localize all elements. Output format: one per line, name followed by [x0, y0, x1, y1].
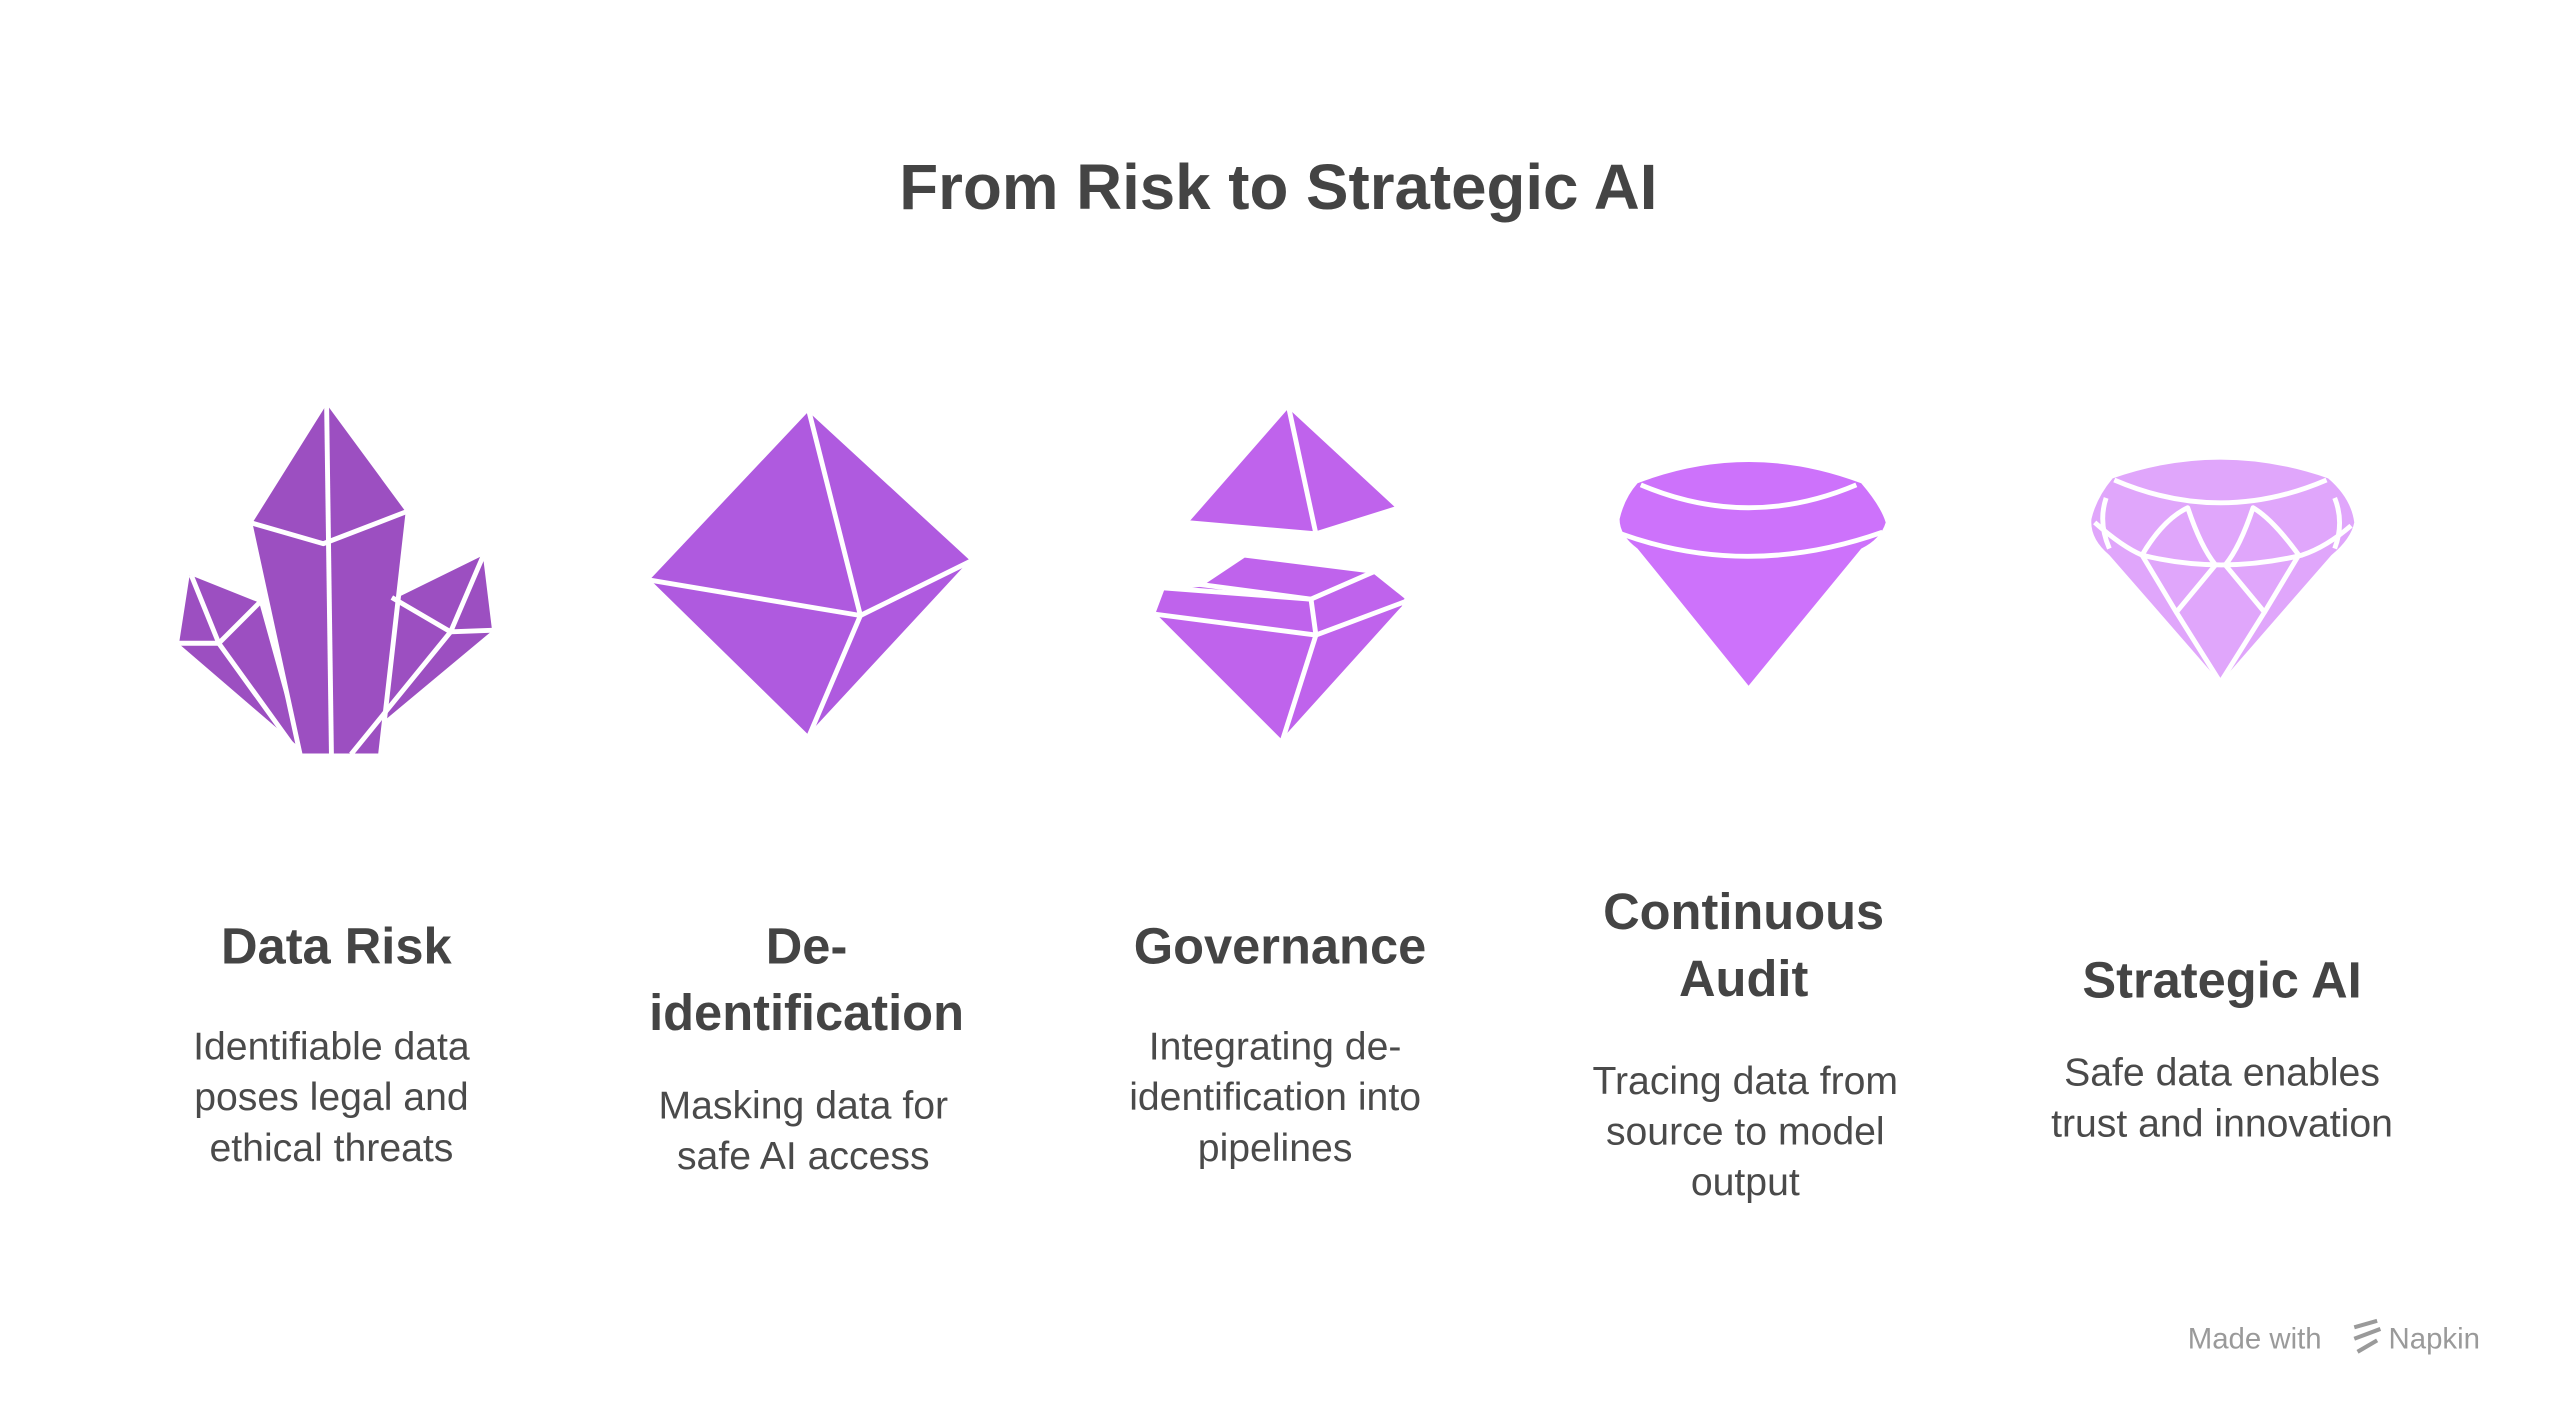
step 4: Continuous Audit — [1593, 883, 1898, 1204]
icon: crystal cluster — [176, 400, 495, 756]
step 2: De-identification: De- — [766, 917, 847, 974]
footer: made with napkin — [2188, 1321, 2480, 1356]
icon: cone gem — [1620, 462, 1886, 686]
step 2: De-identification — [649, 917, 964, 1178]
step 3: Governance: Governance — [1134, 917, 1426, 974]
icon: split crystal — [1153, 405, 1407, 743]
icon: diamond — [2091, 460, 2354, 682]
step 1: Data Risk: ethical threats — [210, 1127, 453, 1170]
icon: octahedron — [647, 408, 973, 738]
step 4: Continuous Audit: Tracing data from — [1593, 1060, 1898, 1103]
step 2: De-identification: identification — [649, 984, 964, 1041]
step 5: Strategic AI: Safe data enables — [2064, 1052, 2380, 1095]
step 4: Continuous Audit: Continuous — [1603, 883, 1884, 940]
step 3: Governance: identification into — [1129, 1076, 1421, 1119]
step 3: Governance: Integrating de- — [1149, 1026, 1401, 1069]
step 3: Governance — [1129, 917, 1426, 1170]
step 2: De-identification: safe AI access — [677, 1135, 930, 1178]
step 4: Continuous Audit: source to model — [1606, 1110, 1885, 1153]
step 4: Continuous Audit: Audit — [1679, 950, 1808, 1007]
step 5: Strategic AI: Strategic AI — [2082, 952, 2362, 1009]
step 1: Data Risk — [193, 917, 470, 1170]
footer: made with napkin: Napkin — [2389, 1323, 2480, 1356]
step 1: Data Risk: poses legal and — [194, 1076, 469, 1119]
step 4: Continuous Audit: output — [1691, 1161, 1800, 1204]
step 5: Strategic AI: trust and innovation — [2051, 1102, 2393, 1145]
step 2: De-identification: Masking data for — [658, 1084, 948, 1127]
step 1: Data Risk: Data Risk — [221, 917, 453, 974]
step 1: Data Risk: Identifiable data — [193, 1026, 470, 1069]
footer: made with napkin: Made with — [2188, 1323, 2322, 1356]
title: From Risk to Strategic AI — [899, 152, 1657, 223]
step 5: Strategic AI — [2051, 952, 2393, 1145]
step 3: Governance: pipelines — [1198, 1127, 1352, 1170]
